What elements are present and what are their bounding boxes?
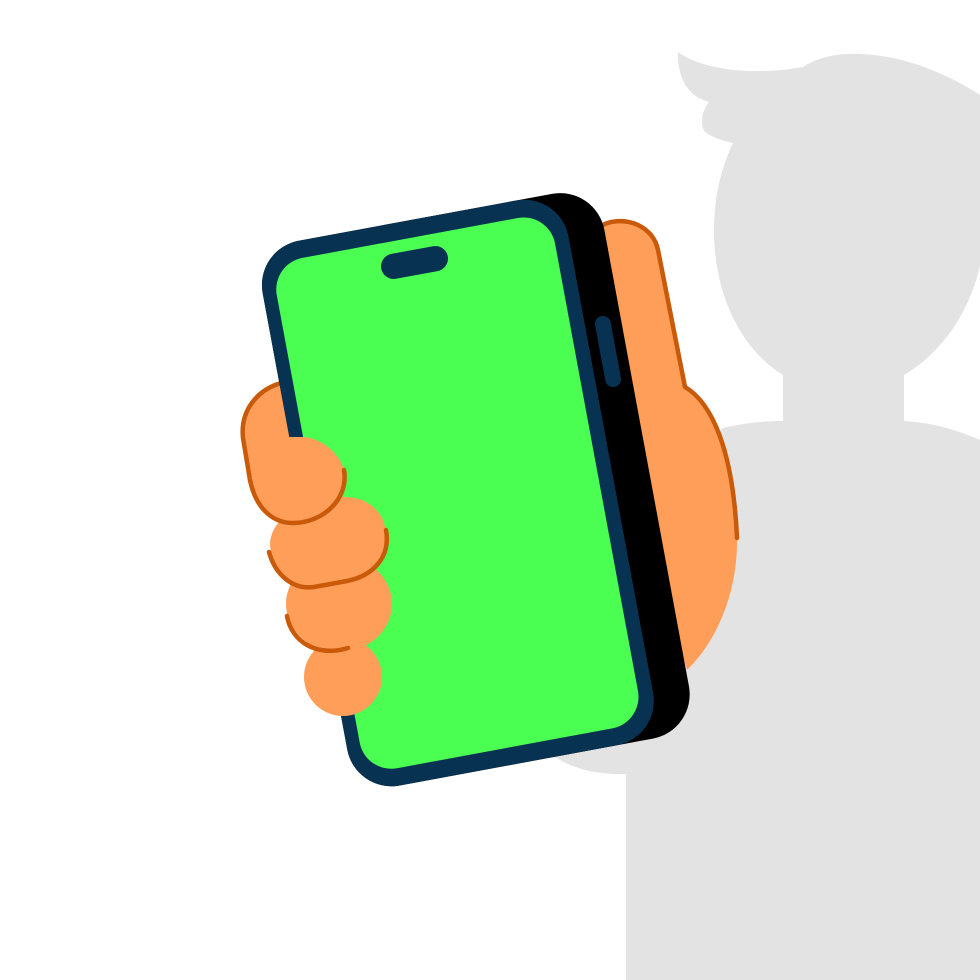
- phone screen: [271, 212, 644, 774]
- phone front frame: [254, 192, 661, 794]
- thumb base behind phone: [243, 382, 310, 490]
- phone body back: [254, 186, 697, 794]
- phone notch: [379, 244, 450, 281]
- little finger: [304, 638, 382, 716]
- silhouette: person in background: [555, 52, 980, 980]
- back of hand: [598, 221, 737, 670]
- middle finger: [269, 497, 387, 587]
- side button: [594, 315, 622, 388]
- thumb tip: [250, 437, 345, 523]
- fingers: [250, 437, 392, 716]
- ring finger: [286, 556, 392, 652]
